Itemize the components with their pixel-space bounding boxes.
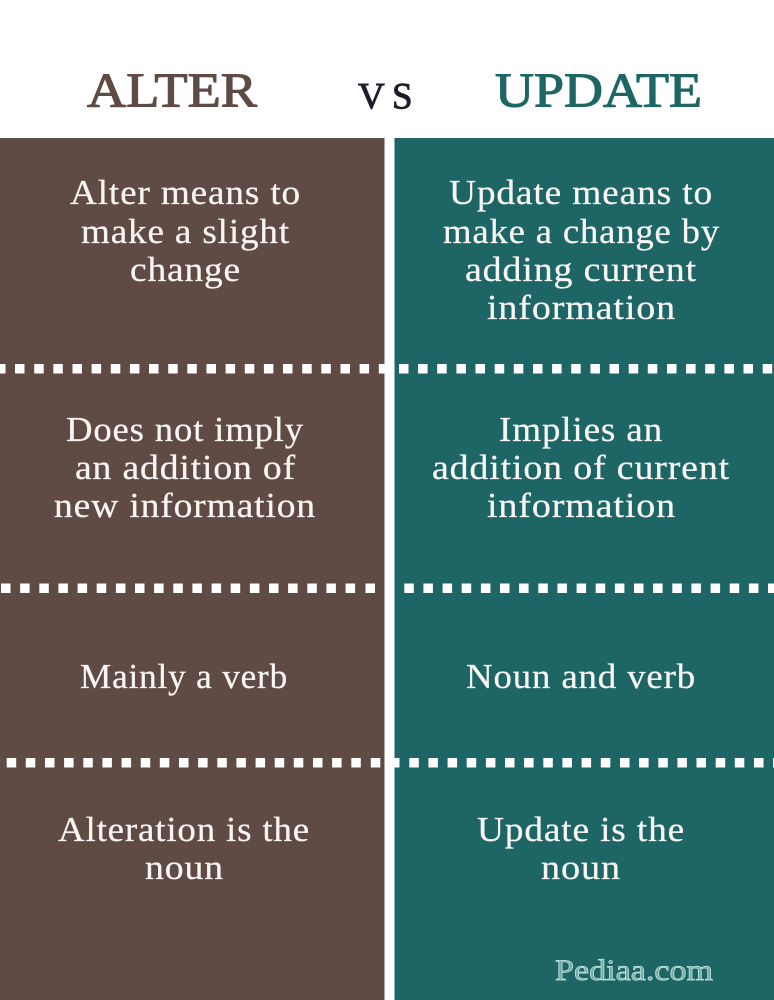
text: update implication: Implies an	[499, 410, 663, 449]
text: alter part of speech: Mainly a verb	[80, 657, 288, 696]
brand: Pediaa.com: Pediaa.com	[555, 954, 713, 987]
text: update noun form: Update is the	[477, 810, 685, 849]
text: alter noun form: Alteration is the	[58, 810, 310, 849]
panel: alter column	[0, 138, 384, 1000]
text: alter implication: new information	[54, 486, 316, 525]
panel: update column	[394, 138, 774, 1000]
text: update noun form: noun	[541, 848, 621, 887]
text: update implication	[432, 410, 730, 525]
text: update definition	[443, 173, 720, 327]
text: alter implication	[54, 410, 316, 525]
text: alter definition	[70, 173, 301, 289]
text: alter noun form	[58, 810, 310, 887]
text: alter definition: Alter means to	[70, 173, 301, 212]
text: alter definition: make a slight	[81, 212, 290, 251]
text: alter implication: Does not imply	[66, 410, 304, 449]
text: update definition: make a change by	[443, 212, 720, 251]
text: update implication: information	[487, 486, 676, 525]
divider row 2 dots	[1, 584, 774, 593]
text: update noun form	[477, 810, 685, 887]
title: ALTER: ALTER	[87, 62, 257, 118]
divider row 3 dots	[7, 758, 774, 768]
text: alter implication: an addition of	[75, 448, 296, 487]
text: update part of speech: Noun and verb	[466, 657, 696, 696]
text: alter definition: change	[130, 250, 241, 289]
text: alter noun form: noun	[145, 848, 224, 887]
text: update definition: information	[487, 288, 676, 327]
title: VS: VS	[358, 76, 413, 118]
title: UPDATE: UPDATE	[495, 62, 702, 118]
text: update definition: Update means to	[449, 173, 713, 212]
text: update definition: adding current	[465, 250, 697, 289]
text: update implication: addition of current	[432, 448, 730, 487]
divider row 1 dots	[0, 364, 772, 374]
